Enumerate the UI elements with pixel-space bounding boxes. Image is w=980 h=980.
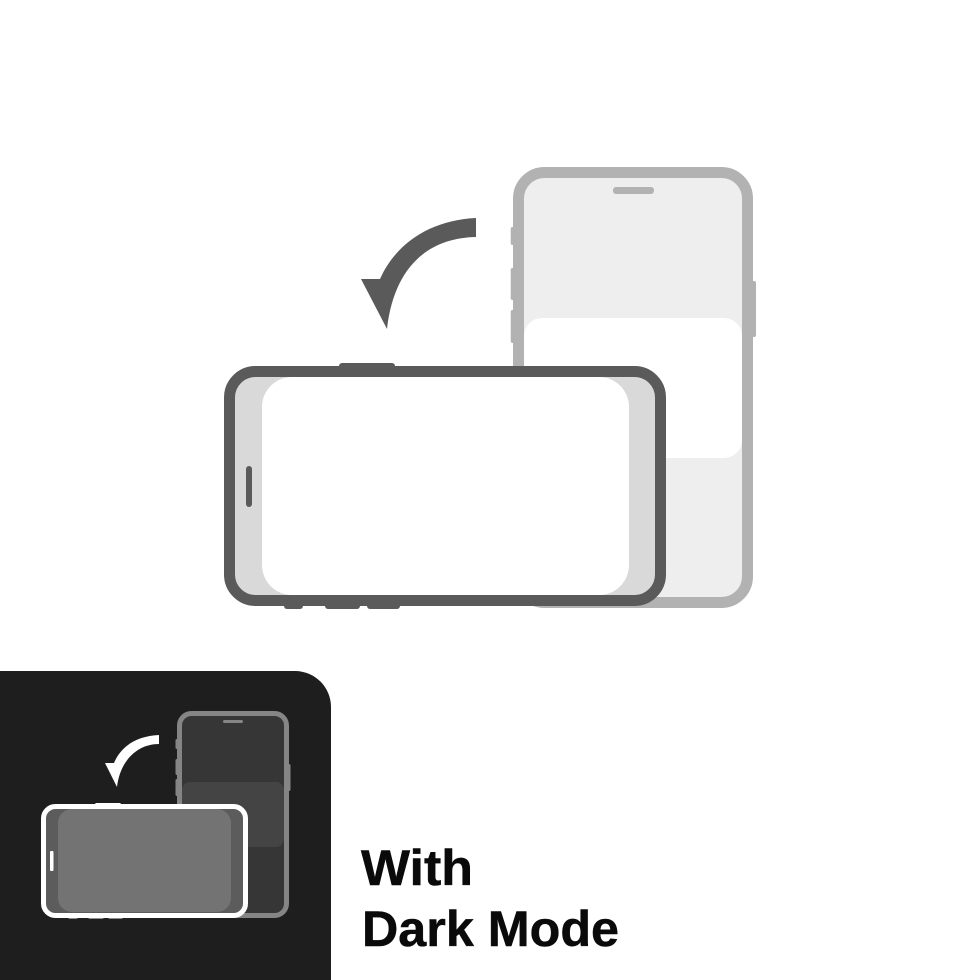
- landscape phone buttons: [284, 363, 400, 609]
- dark portrait phone panel: [182, 782, 284, 847]
- dark landscape phone speaker: [50, 851, 54, 871]
- dark panel background: [0, 671, 331, 980]
- dark landscape phone screen: [58, 809, 231, 912]
- icon: landscape phone (light): [230, 363, 660, 609]
- dark landscape phone buttons: [68, 803, 123, 918]
- portrait phone body: [518, 172, 748, 602]
- dark portrait phone body: [180, 714, 286, 916]
- icon: portrait phone (dark): [176, 714, 290, 916]
- dark portrait phone speaker: [223, 720, 243, 723]
- dark portrait phone side buttons: [176, 739, 290, 796]
- portrait phone side buttons: [511, 227, 756, 343]
- heading line 1: With: [361, 840, 473, 896]
- arrow: rotate (light): [361, 218, 476, 329]
- icon: landscape phone (dark): [44, 803, 246, 918]
- landscape phone white screen: [262, 377, 629, 595]
- heading: with dark mode: [361, 840, 619, 957]
- landscape phone body: [230, 372, 660, 600]
- panel: dark mode preview: [0, 671, 331, 980]
- portrait phone white panel: [524, 318, 742, 458]
- icon: portrait phone (light): [511, 172, 756, 602]
- dark landscape phone body: [44, 806, 246, 916]
- landscape phone speaker: [246, 466, 252, 507]
- arrow: rotate (dark): [105, 735, 159, 787]
- portrait phone speaker: [613, 187, 654, 194]
- heading line 2: Dark Mode: [362, 901, 619, 957]
